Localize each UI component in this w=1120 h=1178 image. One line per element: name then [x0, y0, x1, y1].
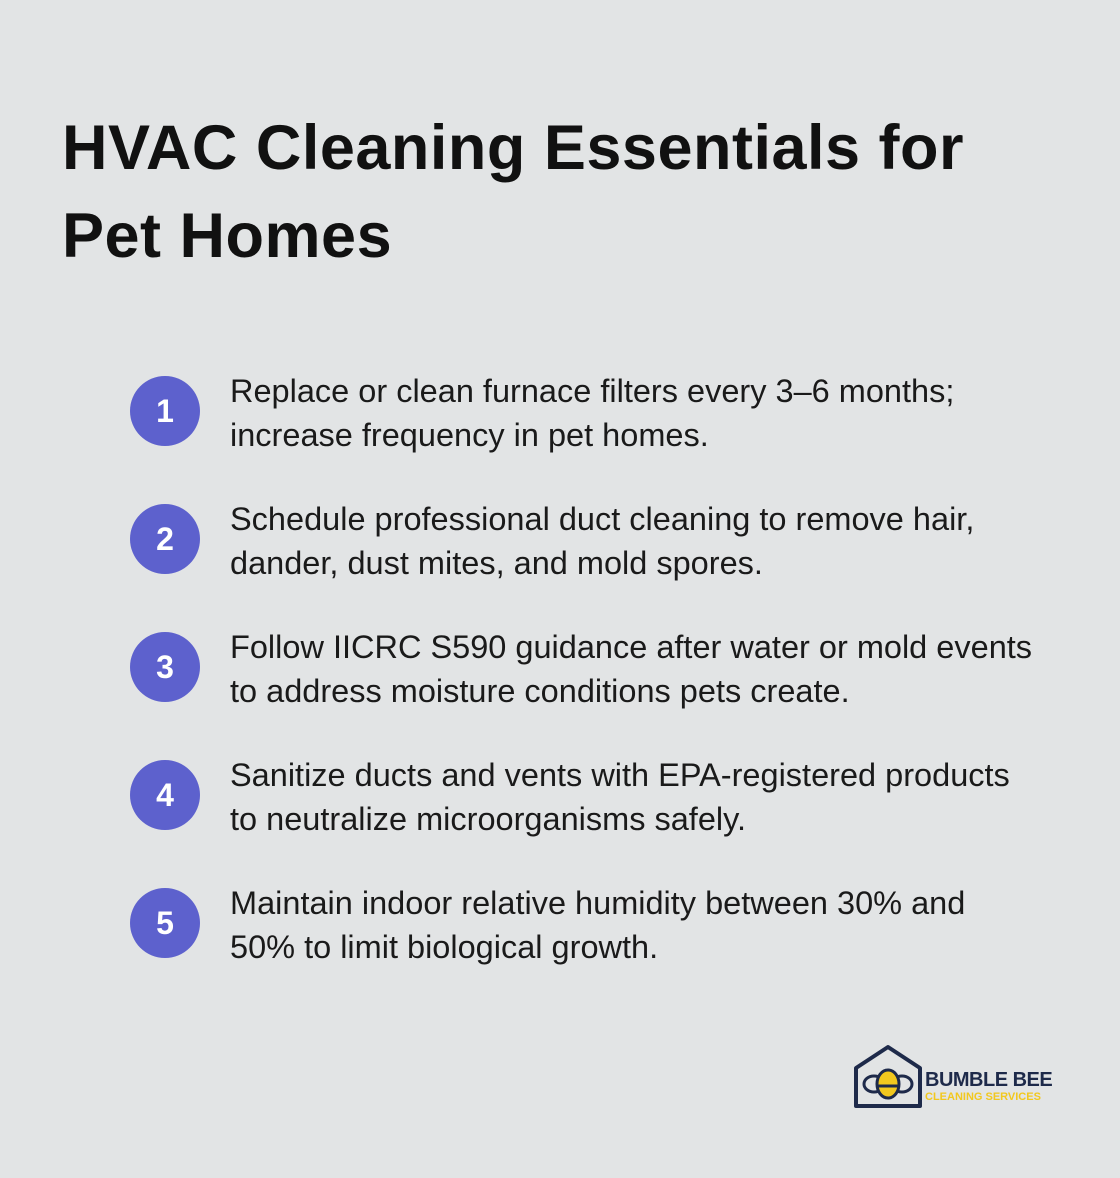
item 3: Follow IICRC S590 guidance after water or mold events — [230, 629, 1032, 665]
brand text: BUMBLE BEE — [925, 1069, 1052, 1091]
item 2: 2 — [156, 521, 174, 557]
item 1: increase frequency in pet homes. — [230, 417, 709, 453]
title — [62, 113, 964, 271]
title: Pet Homes — [62, 201, 392, 271]
item 2: Schedule professional duct cleaning to remove hair, — [230, 501, 974, 537]
item 5: Maintain indoor relative humidity between 30% and — [230, 885, 965, 921]
item 5: 5 — [156, 905, 174, 941]
item 4: Sanitize ducts and vents with EPA-registered products — [230, 757, 1010, 793]
title: HVAC Cleaning Essentials for — [62, 113, 964, 183]
item 1: 1 — [156, 393, 174, 429]
item 3: 3 — [156, 649, 174, 685]
item 1 — [130, 373, 954, 453]
logo: CLEANING SERVICES — [925, 1091, 1041, 1103]
item 5: 50% to limit biological growth. — [230, 929, 658, 965]
item 4 — [130, 757, 1010, 837]
item 3 — [130, 629, 1032, 709]
item 4: 4 — [156, 777, 174, 813]
item 1: Replace or clean furnace filters every 3–6 months; — [230, 373, 954, 409]
logo — [854, 1045, 1052, 1108]
item 2 — [130, 501, 974, 581]
item 2: dander, dust mites, and mold spores. — [230, 545, 763, 581]
icon: bee house — [854, 1045, 922, 1108]
item 4: to neutralize microorganisms safely. — [230, 801, 746, 837]
item 3: to address moisture conditions pets create. — [230, 673, 850, 709]
item 5 — [130, 885, 965, 965]
